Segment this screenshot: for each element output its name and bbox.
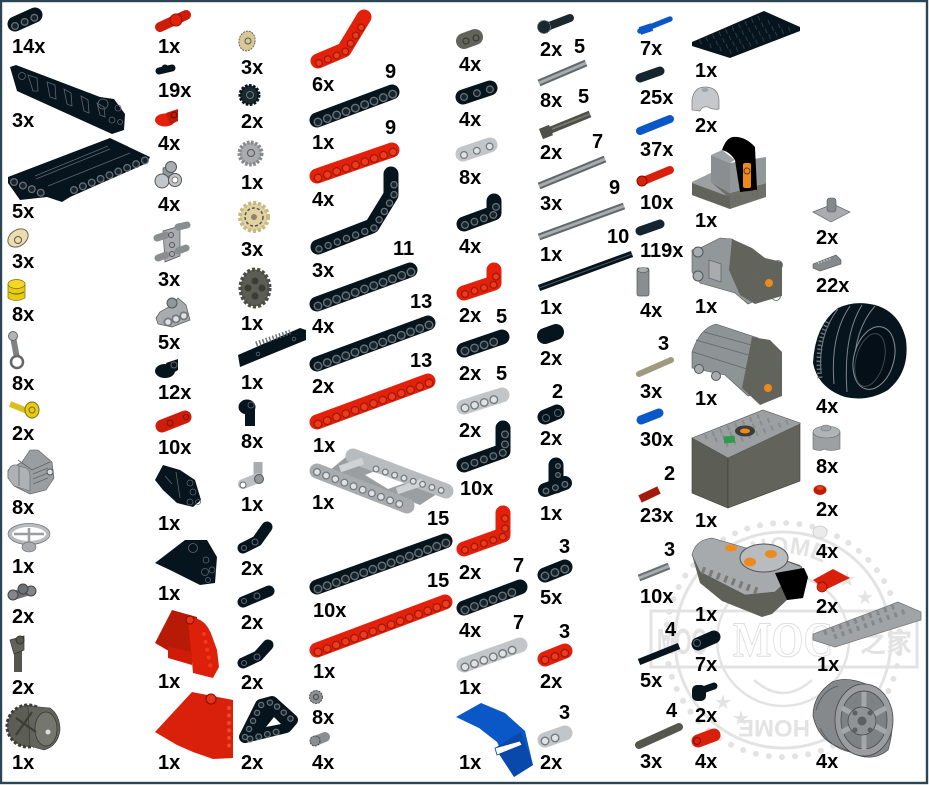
part: wide black panel, 5x <box>8 138 150 223</box>
part: grey dome, 2x: 2x <box>695 115 717 137</box>
part: red beam length 3, 2x: 3 <box>559 621 570 643</box>
part: black tire, 4x: 4x <box>816 396 838 418</box>
part: black beam length 13, 2x: 13 <box>410 291 432 313</box>
part: black beam length 11, 4x <box>312 238 414 338</box>
part: grey gear, 1x <box>240 142 263 194</box>
part: red L beam, 2x <box>459 270 496 327</box>
part: black 3-hole beam, 14x: 14x <box>12 36 45 58</box>
part: dark grey pin stick, 2x: 2x <box>12 677 34 699</box>
part: blue long pin, 37x: 37x <box>640 139 673 161</box>
part: black gear rack, 1x <box>238 328 306 394</box>
part: blue short pin, 30x: 30x <box>640 429 673 451</box>
part: tiny black connector, 19x <box>158 64 191 102</box>
part: light grey beam length 7, 1x <box>459 612 524 699</box>
part: black axle length 4, 5x <box>639 619 679 692</box>
part: red plate with pin hole, 2x <box>813 569 850 618</box>
part: black gear rack, 1x: 1x <box>241 372 263 394</box>
part: black connector, 12x <box>155 359 191 404</box>
part: light grey beam length 5, 2x: 5 <box>496 363 507 385</box>
part: black straight connector, 2x <box>241 591 269 634</box>
part: red bent beam, 6x <box>312 17 366 96</box>
part: yellow axle with bush, 2x: 2x <box>12 423 34 445</box>
part: blue short pin, 30x <box>640 413 673 451</box>
part: blue long pin, 37x <box>640 119 673 161</box>
part: black beam length 3, 5x: 3 <box>559 536 570 558</box>
column 5 of parts <box>456 35 533 777</box>
part: black beam length 5, 2x <box>459 306 507 385</box>
part: black friction pin, 25x: 25x <box>640 87 673 109</box>
part: black L beam, 4x: 4x <box>459 236 481 258</box>
part: grey axle length 7, 3x: 9 <box>609 177 620 199</box>
part: grey gear, 1x: 1x <box>241 172 263 194</box>
part: black beam length 11, 4x: 4x <box>312 316 334 338</box>
part: long grey plate, 1x: 1x <box>817 654 839 676</box>
part: black axle length 10, 1x: 1x <box>540 297 562 319</box>
part: red beam length 15, 1x <box>313 570 449 683</box>
part: grey axle length 9, 1x: 10 <box>607 226 629 248</box>
part: yellow cylinder, 8x <box>8 280 34 326</box>
part: battery box, 1x <box>692 410 800 532</box>
part: black pin with bush, 2x: 2x <box>540 39 562 61</box>
part: wide black panel, 5x: 5x <box>12 201 34 223</box>
part: XL motor, 1x: 1x <box>695 388 717 410</box>
part: dark grey axle pin length 4, 3x <box>639 700 679 773</box>
part: dark grey crown gear, 1x: 1x <box>241 313 263 335</box>
part: dark grey crown gear, 1x <box>240 270 270 335</box>
part: tan large gear, 3x: 3x <box>241 239 263 261</box>
part: dark grey axle pin length 4, 3x: 3x <box>640 751 662 773</box>
part: grey corner connector, 1x <box>240 462 264 516</box>
part: grey grille tile, 22x <box>813 255 849 297</box>
part: red long L beam, 2x: 2x <box>459 562 481 584</box>
part: grey plate with stud, 2x <box>813 198 850 249</box>
part: grey axle length 3, 10x: 3 <box>664 539 675 561</box>
part: black triangular frame, 2x: 2x <box>241 752 263 774</box>
part: IR remote, 1x: 1x <box>695 604 717 626</box>
part: black cylinder, 7x <box>694 637 717 676</box>
part: small grey bush, 8x: 8x <box>312 707 334 729</box>
part: tan axle length 3, 3x: 3 <box>658 333 669 355</box>
part: tiny black connector, 19x: 19x <box>158 80 191 102</box>
part: black beam length 7, 4x: 4x <box>459 620 481 642</box>
part: black small gear, 2x: 2x <box>241 111 263 133</box>
watermark stamp: ★ <box>838 567 856 591</box>
part: red long pin, 10x <box>637 170 673 214</box>
part: tan large gear, 3x <box>240 203 268 261</box>
watermark stamp: HOME <box>738 714 810 741</box>
part: grey cylinder, 4x <box>637 268 662 322</box>
part: grey axle length 7, 3x <box>539 159 620 215</box>
part: black 2-hole block, 2x <box>540 332 562 370</box>
part: black 3-hole thin beam, 4x <box>459 88 491 131</box>
part: red L beam, 2x: 2x <box>459 305 481 327</box>
part: red long L beam, 2x <box>459 513 505 584</box>
part: red beam length 9, 4x: 4x <box>312 189 334 211</box>
part: red round plate, 2x: 2x <box>816 499 838 521</box>
part: small grey double bush, 4x <box>310 736 334 774</box>
part: dark grey axle pin length 4, 3x: 4 <box>666 700 678 722</box>
part: black axle length 10, 1x <box>539 254 632 319</box>
part: grey grille tile, 22x: 22x <box>816 275 849 297</box>
part: black beam length 9, 1x: 1x <box>312 132 334 154</box>
part: yellow axle with bush, 2x <box>10 402 39 445</box>
part: grey triple connector, 5x: 5x <box>158 332 180 354</box>
part: dark grey 2-hole beam, 4x <box>459 35 481 76</box>
part: steering wheel, 1x: 1x <box>12 556 34 578</box>
watermark stamp: ★ <box>856 585 874 609</box>
part: grey axle length 5, 8x: 8x <box>540 90 562 112</box>
part: dark grey axle with stop, 2x: 7 <box>592 131 603 153</box>
part: grey wheel rim, 4x: 4x <box>816 751 838 773</box>
part: light grey beam length 3, 2x <box>540 702 570 774</box>
part: black beam length 15, 10x <box>313 508 449 622</box>
column 7 of parts <box>637 19 683 773</box>
part: black friction pin B, 119x <box>640 224 683 262</box>
part: black double-bent beam, 3x: 3x <box>312 260 334 282</box>
part: red pin connector, 1x <box>158 14 186 58</box>
watermark stamp: MOC <box>657 621 707 662</box>
part: long black panel, 3x: 3x <box>12 110 34 132</box>
part: IR remote, 1x <box>692 538 808 626</box>
part: light grey beam length 7, 1x: 7 <box>513 612 524 634</box>
part: black beam length 15, 10x: 15 <box>427 508 449 530</box>
part: black connector, 12x: 12x <box>158 382 191 404</box>
part: black beam length 7, 4x: 7 <box>513 555 524 577</box>
part: black 3-hole beam, 14x <box>12 15 45 58</box>
part: grey plate with stud, 2x: 2x <box>816 227 838 249</box>
part: red bent beam, 6x: 6x <box>312 74 334 96</box>
part: red beam length 3, 2x <box>540 621 570 693</box>
part: black axle length 4, 5x: 4 <box>665 619 677 641</box>
part: long grey plate, 1x <box>813 602 921 676</box>
part: black angled connector, 2x: 2x <box>241 558 263 580</box>
part: black angled connector B, 2x <box>241 645 268 694</box>
part: black beam length 13, 2x: 2x <box>312 376 334 398</box>
part: light grey beam length 7, 1x: 1x <box>459 677 481 699</box>
part: black beam length 11, 4x: 11 <box>393 238 414 260</box>
part: medium motor, 1x <box>692 238 782 318</box>
part: grey axle length 9, 1x <box>539 206 629 266</box>
part: black cylinder, 7x: 7x <box>695 654 717 676</box>
part: grey engine block, 8x <box>8 450 54 519</box>
part: grey open frame, 1x <box>312 452 446 514</box>
part: dark red axle length 2, 23x: 23x <box>640 505 673 527</box>
part: grey H connector, 3x: 3x <box>158 269 180 291</box>
part: grey H connector, 3x <box>157 225 187 291</box>
part: black axle length 4, 5x: 5x <box>640 670 662 692</box>
part: black pin connector, 8x <box>238 400 263 453</box>
part: black T beam, 1x: 1x <box>540 503 562 525</box>
part: tan connector, 3x: 3x <box>12 251 34 273</box>
part: black beam length 3, 5x: 5x <box>540 587 562 609</box>
part: black 2-hole block, 2x: 2x <box>540 348 562 370</box>
watermark stamp <box>650 520 918 760</box>
part: light grey beam length 5, 2x <box>459 363 507 442</box>
part: grey link, 8x <box>8 332 34 395</box>
watermark stamp: ★ <box>732 706 750 730</box>
part: black double-bent beam, 3x <box>312 174 394 282</box>
part: medium motor, 1x: 1x <box>695 296 717 318</box>
part: red beam length 15, 1x: 1x <box>313 661 335 683</box>
part: grey axle length 3, 10x <box>639 539 675 608</box>
part: blue curved panel, 1x <box>456 703 533 777</box>
part: small grey double connector, 2x: 2x <box>12 606 34 628</box>
part: light grey 3-hole thin beam, 8x <box>459 145 491 189</box>
part: black beam length 2, 2x: 2 <box>552 381 563 403</box>
part: small grey bush, 8x <box>310 690 334 729</box>
part: black friction pin, 25x <box>640 71 673 109</box>
part: light grey 3-hole thin beam, 8x: 8x <box>459 167 481 189</box>
part: black connector with stud, 2x <box>692 685 717 727</box>
part: black L beam, 4x <box>459 201 496 258</box>
column 1 of parts <box>4 15 150 774</box>
part: red cylinder, 4x: 4x <box>695 751 717 773</box>
part: long black panel, 3x <box>10 65 125 134</box>
part: grey round brick, 8x <box>813 425 840 478</box>
part: black beam length 13, 2x <box>312 291 432 398</box>
part: red curved panel with brace, 1x: 1x <box>158 671 180 693</box>
part: XL motor, 1x <box>692 324 782 410</box>
part: black beam length 15, 10x: 10x <box>313 600 346 622</box>
part: black curved panel small, 1x <box>155 465 201 535</box>
part: black long L beam, 10x: 10x <box>460 478 493 500</box>
part: small grey double bush, 4x: 4x <box>312 752 334 774</box>
part: black plate, 1x: 1x <box>695 60 717 82</box>
part: grey cylinder, 4x: 4x <box>640 300 662 322</box>
part: black straight connector, 2x: 2x <box>241 612 263 634</box>
part: clear round plate, 4x: 4x <box>816 541 838 563</box>
part: black triangular frame, 2x <box>241 702 292 774</box>
watermark stamp: HOME <box>750 537 828 562</box>
part: red round plate, 2x <box>814 485 838 521</box>
part: black plate, 1x <box>692 11 800 82</box>
part: black long L beam, 10x <box>460 428 505 500</box>
part: dark grey axle with stop, 2x: 2x <box>540 142 562 164</box>
part: grey axle pin connector, 4x <box>155 162 182 216</box>
part: light grey beam length 3, 2x: 3 <box>559 702 570 724</box>
part: black curved panel medium, 1x: 1x <box>158 583 180 605</box>
part: grey axle length 3, 10x: 10x <box>640 586 673 608</box>
part: large red curved panel, 1x: 1x <box>158 752 180 774</box>
column 4 of parts: long beams <box>310 17 449 774</box>
part: yellow cylinder, 8x: 8x <box>12 304 34 326</box>
part: black 3-hole thin beam, 4x: 4x <box>459 109 481 131</box>
part: grey triple connector, 5x <box>156 298 190 354</box>
part: light grey beam length 3, 2x: 2x <box>540 752 562 774</box>
part: dark grey 2-hole beam, 4x: 4x <box>459 54 481 76</box>
part: red beam length 13, 1x: 1x <box>313 435 335 457</box>
part: black pin connector, 8x: 8x <box>241 431 263 453</box>
part: tan connector, 3x <box>4 225 34 273</box>
part: black small gear, 2x <box>240 86 263 133</box>
part: black curved panel medium, 1x <box>155 540 217 605</box>
part: grey axle length 5, 8x: 5 <box>578 86 589 108</box>
part: grey dome, 2x <box>692 87 719 137</box>
watermark stamp: 之家 <box>860 623 912 660</box>
part: blue pin, 7x <box>640 19 670 60</box>
part: red connector, 4x <box>155 109 180 155</box>
part: steering wheel, 1x <box>8 524 50 578</box>
part: grey wheel rim, 4x <box>813 679 893 773</box>
part: red plate with pin hole, 2x: 2x <box>816 596 838 618</box>
part: red beam length 9, 4x <box>312 117 396 211</box>
part: red beam length 13, 1x: 13 <box>410 350 432 372</box>
part: black pin with bush, 2x: 5 <box>574 36 585 58</box>
part: black connector with stud, 2x: 2x <box>695 705 717 727</box>
part: red beam length 9, 4x: 9 <box>385 117 396 139</box>
part: red beam length 15, 1x: 15 <box>427 570 449 592</box>
part: red 2-hole connector, 10x: 10x <box>158 437 191 459</box>
part: blue pin, 7x: 7x <box>640 38 662 60</box>
part: tan small gear, 3x: 3x <box>241 57 263 79</box>
part: black angled connector, 2x <box>241 527 267 580</box>
part: large red curved panel, 1x <box>155 692 233 774</box>
part: black pin with bush, 2x <box>538 18 585 61</box>
part: black beam length 5, 2x: 2x <box>459 363 481 385</box>
watermark stamp: ★ <box>714 690 732 714</box>
part: dark red axle length 2, 23x: 2 <box>664 463 675 485</box>
part: red pin connector, 1x: 1x <box>158 36 180 58</box>
part: blue curved panel, 1x: 1x <box>459 752 481 774</box>
part: red long pin, 10x: 10x <box>640 192 673 214</box>
part: IR receiver, 1x: 1x <box>695 210 717 232</box>
part: black curved panel small, 1x: 1x <box>158 513 180 535</box>
part: black beam length 2, 2x: 2x <box>540 428 562 450</box>
part: black beam length 3, 5x <box>540 536 570 609</box>
part: black tire, 4x <box>813 303 907 418</box>
part: red beam length 13, 1x <box>313 350 432 457</box>
part: dark grey differential, 1x <box>7 705 60 774</box>
part: small grey double connector, 2x <box>8 584 36 628</box>
part: red curved panel with brace, 1x <box>155 610 219 693</box>
part: dark red axle length 2, 23x <box>640 463 675 527</box>
part: black T beam, 1x <box>540 465 566 525</box>
part: tan small gear, 3x <box>237 30 263 79</box>
part: grey link, 8x: 8x <box>12 373 34 395</box>
part: black beam length 7, 4x <box>459 555 524 642</box>
part: grey corner connector, 1x: 1x <box>241 494 263 516</box>
part: grey round brick, 8x: 8x <box>816 456 838 478</box>
column 2 of parts <box>155 14 233 774</box>
watermark stamp: MOC <box>733 611 833 667</box>
part: grey open frame, 1x: 1x <box>312 492 334 514</box>
part: tan axle length 3, 3x <box>639 333 671 403</box>
part: dark grey pin stick, 2x <box>10 636 34 699</box>
part: black beam length 2, 2x <box>540 381 563 450</box>
part: light grey beam length 5, 2x: 2x <box>459 420 481 442</box>
part: black beam length 9, 1x <box>312 61 396 154</box>
part: black beam length 5, 2x: 5 <box>496 306 507 328</box>
part: grey axle length 5, 8x <box>539 63 589 112</box>
part: grey engine block, 8x: 8x <box>12 497 34 519</box>
part: dark grey differential, 1x: 1x <box>12 752 34 774</box>
part: dark grey axle with stop, 2x <box>540 114 603 164</box>
column 9 of parts <box>813 198 921 773</box>
part: red cylinder, 4x <box>694 735 717 773</box>
part: red beam length 3, 2x: 2x <box>540 671 562 693</box>
part: black beam length 9, 1x: 9 <box>385 61 396 83</box>
part: black angled connector B, 2x: 2x <box>241 672 263 694</box>
part: red 2-hole connector, 10x <box>158 414 191 459</box>
part: grey axle pin connector, 4x: 4x <box>158 194 180 216</box>
part: black friction pin B, 119x: 119x <box>640 240 683 262</box>
column 6 of parts <box>538 18 632 774</box>
part: tan axle length 3, 3x: 3x <box>640 381 662 403</box>
part: red connector, 4x: 4x <box>158 133 180 155</box>
part: clear round plate, 4x <box>813 526 838 563</box>
part: battery box, 1x: 1x <box>695 510 717 532</box>
column 3 of parts <box>237 30 306 774</box>
part: grey axle length 9, 1x: 1x <box>540 244 562 266</box>
part: IR receiver, 1x <box>692 137 766 232</box>
part: grey axle length 7, 3x: 3x <box>540 193 562 215</box>
column 8 of parts: plates and electronics <box>692 11 808 773</box>
